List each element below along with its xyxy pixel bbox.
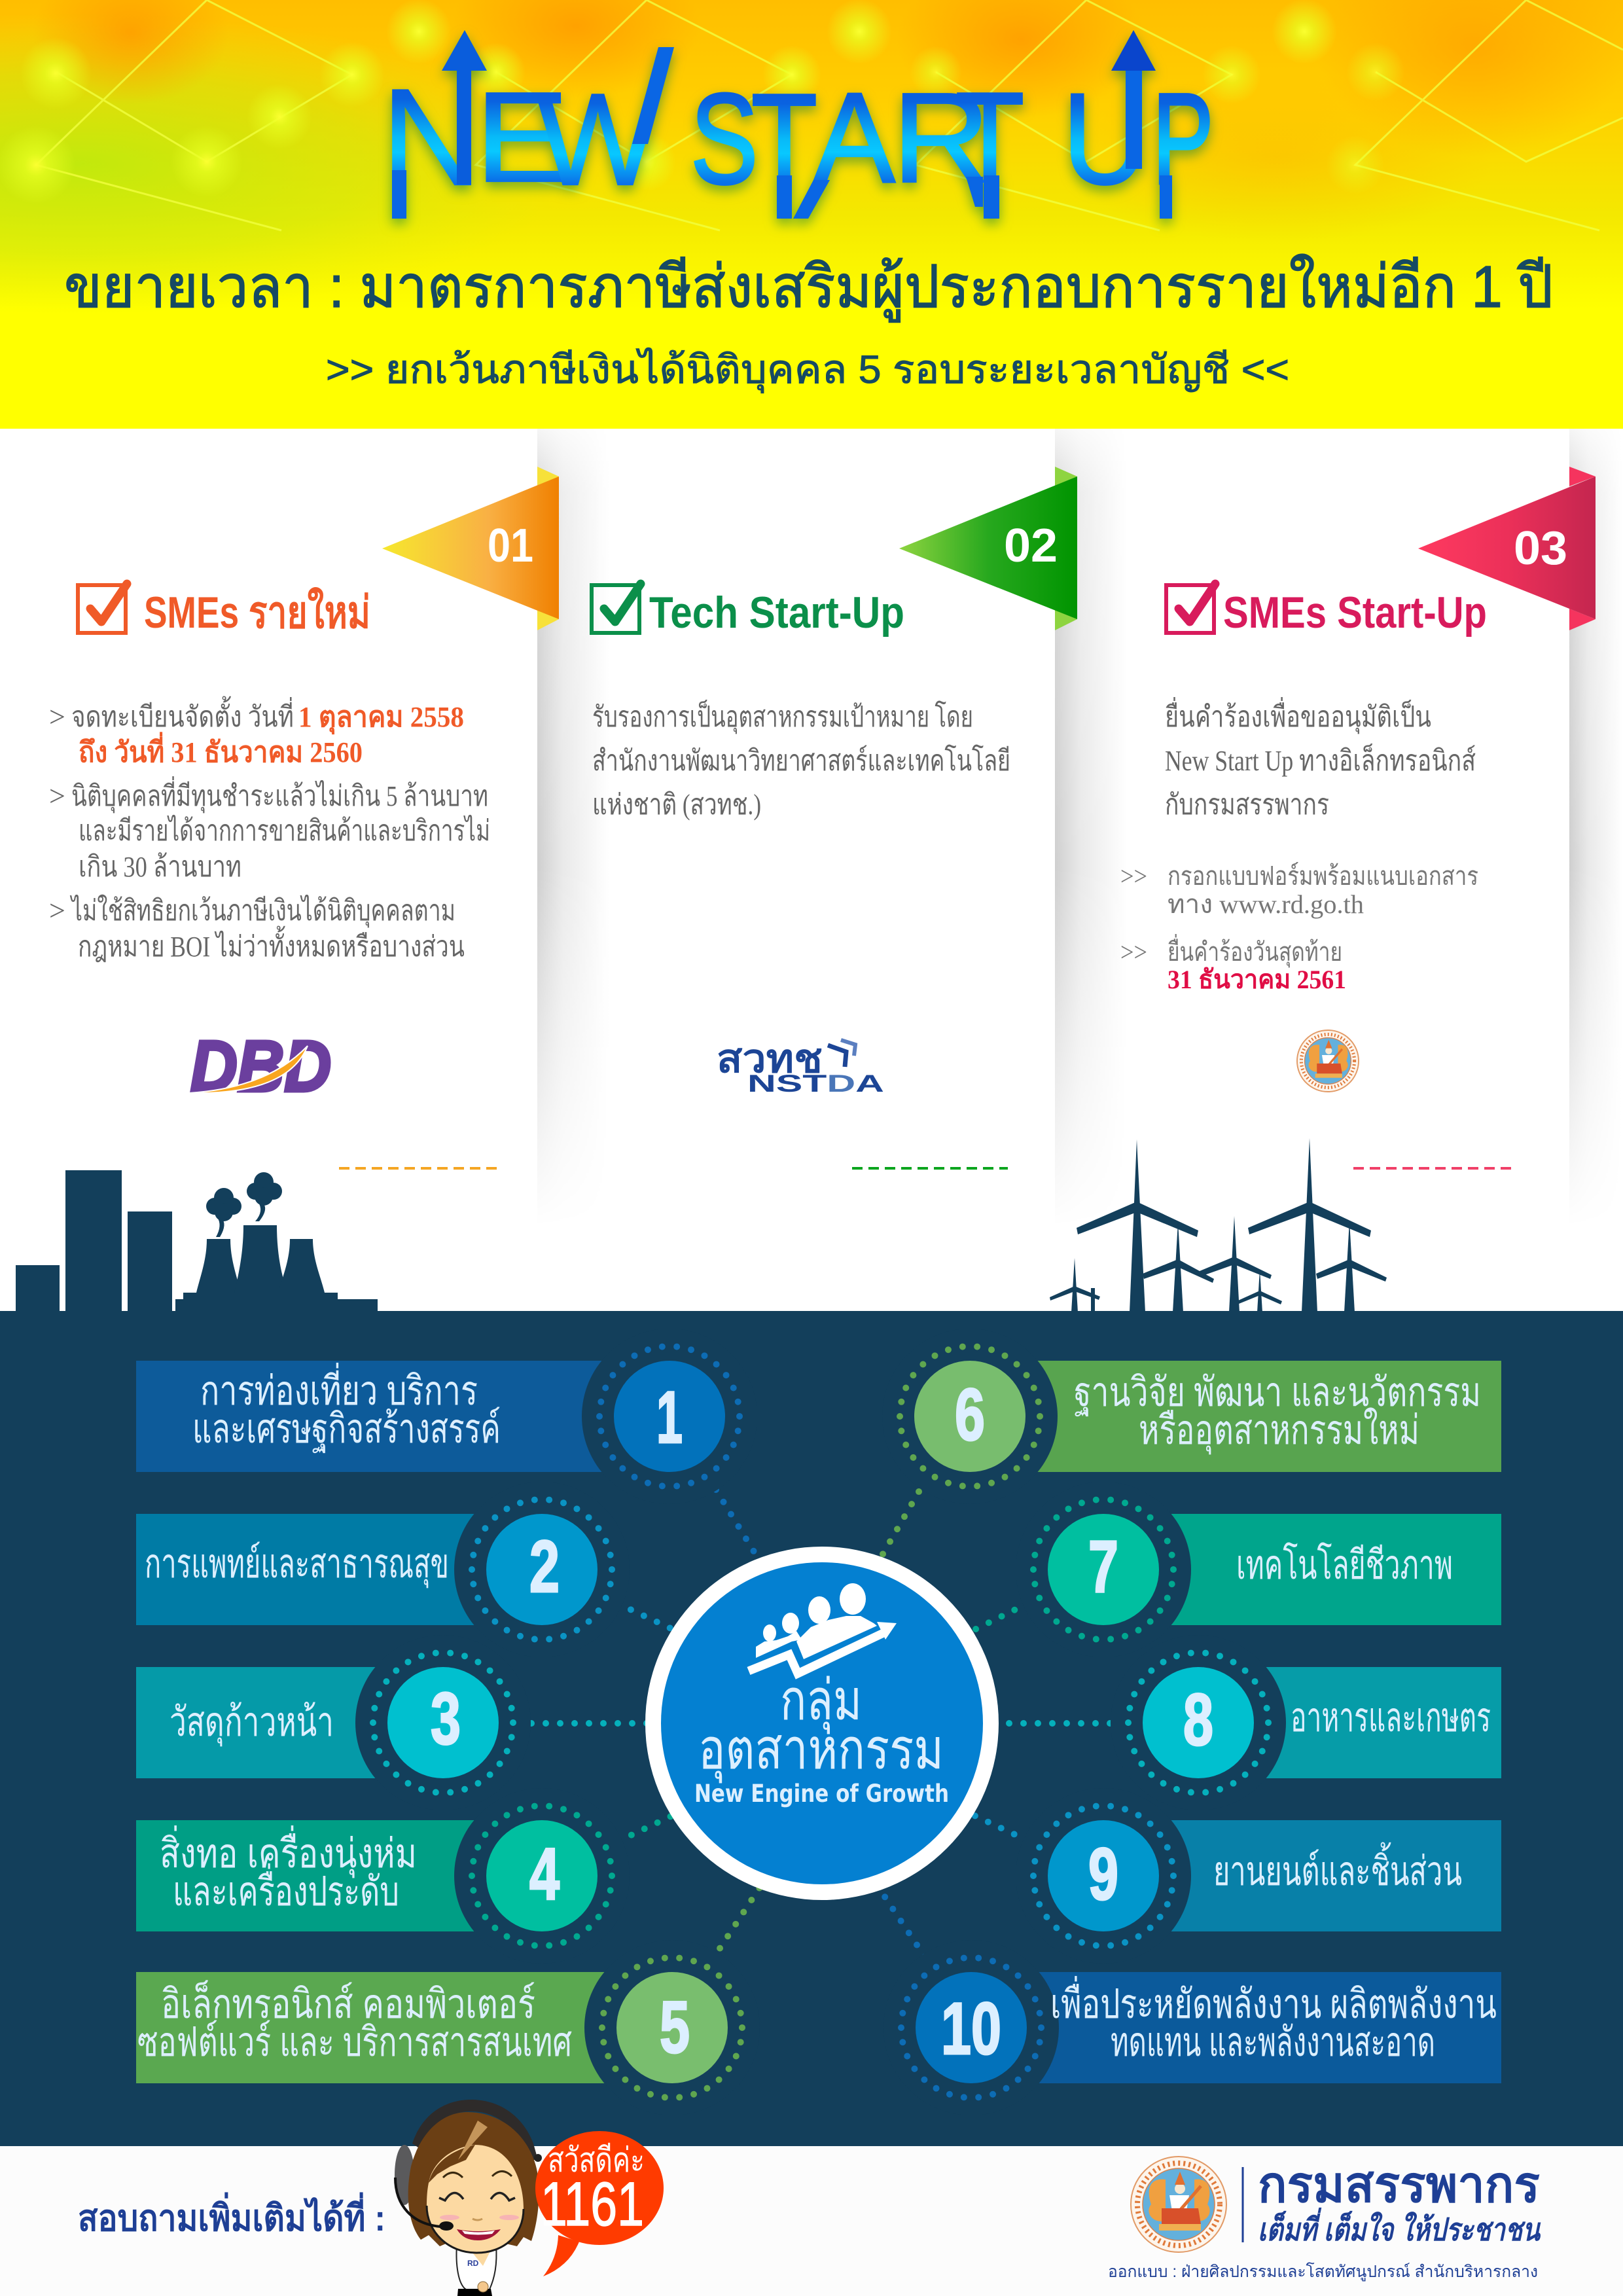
design credit: ออกแบบ : ฝ่ายศิลปกรรมและโสตทัศนูปกรณ์ สำนักบริหารกลาง — [1108, 2262, 1538, 2282]
body text: conditions: นิติบุคคลที่มีทุนชำระแล้วไม่เกิน 5 ล้านบาท — [71, 776, 488, 814]
row 4: textiles: สิ่งทอ เครื่องนุ่งห่ม — [160, 1825, 417, 1878]
body text: conditions: > — [49, 895, 65, 927]
body text: certification: สำนักงานพัฒนาวิทยาศาสตร์และเทคโนโลยี — [592, 744, 1010, 777]
row 1: tourism: และเศรษฐกิจสร้างสรรค์ — [192, 1407, 501, 1453]
panel 1: SMEs new — [49, 467, 559, 1168]
row 6: research and innovation — [882, 1329, 1501, 1504]
icon: people with growth arrow — [749, 1583, 897, 1674]
list: how to apply: 31 ธันวาคม 2561 — [1168, 965, 1346, 994]
logo: Revenue Department seal small — [1297, 1030, 1359, 1092]
title: New Start Up: N — [382, 60, 482, 214]
body text: certification: แห่งชาติ (สวทช.) — [592, 789, 761, 821]
title: New Start Up: S — [690, 67, 758, 211]
speech bubble: 1161: สวัสดีค่ะ — [548, 2142, 645, 2179]
list: how to apply: >> — [1120, 861, 1147, 891]
title: New Start Up: T — [751, 68, 817, 211]
wind turbines silhouette — [1050, 1138, 1387, 1312]
row 4: textiles: และเครื่องประดับ — [173, 1863, 399, 1914]
title: New Start Up — [382, 30, 1213, 219]
row 8: food and agriculture: อาหารและเกษตร — [1291, 1695, 1491, 1740]
centre hub: industry group — [645, 1547, 999, 1900]
ribbon 01 — [382, 467, 559, 630]
row 1: tourism — [136, 1329, 757, 1504]
title: New Start Up: P — [1152, 67, 1213, 211]
icon: left title arrow — [442, 30, 487, 185]
list: how to apply — [1120, 861, 1478, 994]
row 8: food and agriculture — [1111, 1635, 1501, 1810]
list: how to apply: ยื่นคำร้องวันสุดท้าย — [1168, 934, 1342, 968]
row 3: advanced materials — [136, 1635, 531, 1810]
panel 2: Tech Start-Up — [592, 467, 1077, 1168]
ribbon 02 — [899, 467, 1077, 630]
sub-subtitle heading: >> ยกเว้นภาษีเงินได้นิติบุคคล 5 รอบระยะเวลาบัญชี << — [326, 347, 1289, 393]
body text: application: กับกรมสรรพากร — [1165, 789, 1329, 821]
header banner background — [0, 0, 1623, 429]
icon: right title arrow — [1111, 30, 1156, 169]
hub text: Thai title: กลุ่ม — [780, 1669, 862, 1734]
logo: NSTDA: NST D A — [747, 1070, 884, 1097]
row 4: textiles — [136, 1788, 630, 1964]
list: how to apply: กรอกแบบฟอร์มพร้อมแนบเอกสาร — [1168, 861, 1478, 891]
illustration: call-centre lady: RD — [467, 2259, 479, 2268]
title: New Start Up: A — [813, 66, 895, 209]
row 9: automotive — [1016, 1788, 1501, 1964]
footer enquiry text: สอบถามเพิ่มเติมได้ที่ : — [78, 2192, 385, 2238]
row 3: advanced materials: 3 — [431, 1677, 461, 1759]
dark industries section background — [0, 1311, 1623, 2146]
row 10: energy: ทดแทน และพลังงานสะอาด — [1111, 2020, 1435, 2065]
illustration: call-centre lady — [395, 2100, 542, 2296]
body text: application: ยื่นคำร้องเพื่อขออนุมัติเป็น — [1165, 696, 1431, 734]
row 8: food and agriculture: 8 — [1183, 1679, 1213, 1761]
body text: conditions: > — [49, 701, 65, 733]
body text: conditions: > — [49, 780, 65, 812]
icon: checkbox green — [592, 584, 641, 633]
dashed divider orange — [339, 1167, 498, 1170]
panel shadows between columns — [537, 429, 1610, 1163]
logo: NSTDA — [717, 1037, 884, 1097]
row 5: electronics — [136, 1940, 760, 2115]
brand name: Revenue Department: กรมสรรพากร — [1258, 2157, 1540, 2213]
heading: SMEs Start-Up: SMEs Start-Up — [1223, 588, 1487, 637]
logo: Revenue Department seal large — [1131, 2157, 1226, 2252]
row 7: biotechnology — [1016, 1482, 1501, 1657]
body text: conditions — [49, 696, 490, 963]
row 5: electronics: อิเล็กทรอนิกส์ คอมพิวเตอร์ — [161, 1980, 535, 2027]
hub text: Thai title — [698, 1669, 944, 1784]
row 5: electronics: ซอฟต์แวร์ และ บริการสารสนเทศ — [137, 2020, 572, 2065]
body text: application — [1165, 696, 1476, 821]
row 2: medical: 2 — [529, 1526, 560, 1607]
body text: conditions: กฎหมาย BOI ไม่ว่าทั้งหมดหรือบางส่วน — [78, 925, 465, 963]
row 10: energy — [883, 1940, 1501, 2115]
row 9: automotive: ยานยนต์และชิ้นส่วน — [1213, 1842, 1462, 1894]
brand slogan: เต็มที่ เต็มใจ ให้ประชาชน — [1258, 2207, 1541, 2248]
ribbon 03 — [1418, 467, 1596, 630]
row 2: medical — [136, 1482, 630, 1657]
body text: certification — [592, 700, 1010, 821]
logo: DBD: DBD — [190, 1026, 331, 1107]
ribbon 03: 03 — [1514, 522, 1567, 575]
footer background — [0, 2146, 1623, 2296]
title: New Start Up: T — [955, 67, 1024, 210]
logo: NSTDA: สวทช — [717, 1037, 823, 1081]
dotted connectors to centre — [517, 1479, 1126, 1964]
hub text: New Engine of Growth: New Engine of Growth — [694, 1780, 949, 1808]
title: New Start Up: R — [892, 66, 990, 209]
title: New Start Up: W — [536, 67, 660, 213]
row 7: biotechnology: เทคโนโลยีชีวภาพ — [1236, 1542, 1453, 1588]
icon: checkbox orange — [78, 584, 127, 633]
list: how to apply: ทาง www.rd.go.th — [1168, 889, 1364, 919]
dashed divider pink — [1353, 1167, 1513, 1170]
row 7: biotechnology: 7 — [1088, 1526, 1118, 1607]
body text: certification: รับรองการเป็นอุตสาหกรรมเป้าหมาย โดย — [592, 700, 973, 734]
hub text: Thai title: อุตสาหกรรม — [698, 1718, 944, 1784]
panel 3: SMEs Start-Up — [1120, 467, 1596, 1168]
title: New Start Up: E — [475, 65, 569, 209]
body text: conditions: ถึง วันที่ 31 ธันวาคม 2560 — [79, 732, 363, 768]
speech bubble: 1161: 1161 — [541, 2170, 644, 2239]
row 5: electronics: 5 — [660, 1986, 690, 2068]
row 9: automotive: 9 — [1088, 1833, 1118, 1915]
divider: logo separator — [1242, 2167, 1243, 2242]
subtitle heading: ขยายเวลา : มาตรการภาษีส่งเสริมผู้ประกอบการรายใหม่อีก 1 ปี — [64, 255, 1553, 323]
row 2: medical: การแพทย์และสาธารณสุข — [145, 1541, 449, 1588]
body text: conditions: เกิน 30 ล้านบาท — [79, 851, 241, 883]
row 6: research and innovation: หรืออุตสาหกรรมใหม่ — [1139, 1407, 1419, 1454]
row 6: research and innovation: 6 — [955, 1374, 985, 1456]
icon: checkbox pink — [1166, 584, 1215, 633]
row 1: tourism: การท่องเที่ยว บริการ — [200, 1363, 478, 1414]
dashed divider green — [852, 1167, 1008, 1170]
row 6: research and innovation: ฐานวิจัย พัฒนา และนวัตกรรม — [1074, 1370, 1481, 1416]
ribbon 01: 01 — [488, 520, 533, 572]
speech bubble: 1161 — [535, 2131, 664, 2276]
row 1: tourism: 1 — [656, 1376, 683, 1458]
body text: conditions: ไม่ใช้สิทธิยกเว้นภาษีเงินได้นิติบุคคลตาม — [70, 894, 455, 928]
row 3: advanced materials: วัสดุก้าวหน้า — [169, 1700, 334, 1746]
body text: conditions: จดทะเบียนจัดตั้ง วันที่ — [71, 696, 294, 733]
row 10: energy: 10 — [941, 1988, 1001, 2070]
body text: application: New Start Up ทางอิเล็กทรอนิกส์ — [1165, 744, 1476, 777]
title: New Start Up: U — [1063, 66, 1148, 211]
row 10: energy: เพื่อประหยัดพลังงาน ผลิตพลังงาน — [1050, 1976, 1497, 2027]
row 4: textiles: 4 — [529, 1833, 560, 1915]
heading: Tech Start-Up: Tech Start-Up — [649, 588, 904, 637]
body text: conditions: และมีรายได้จากการขายสินค้าและบริการไม่ — [79, 814, 490, 847]
body text: conditions: 1 ตุลาคม 2558 — [298, 701, 464, 735]
city and factory silhouette — [16, 1170, 378, 1312]
heading: SMEs new: SMEs รายใหม่ — [144, 586, 370, 637]
ribbon 02: 02 — [1004, 520, 1058, 572]
list: how to apply: >> — [1120, 937, 1147, 967]
